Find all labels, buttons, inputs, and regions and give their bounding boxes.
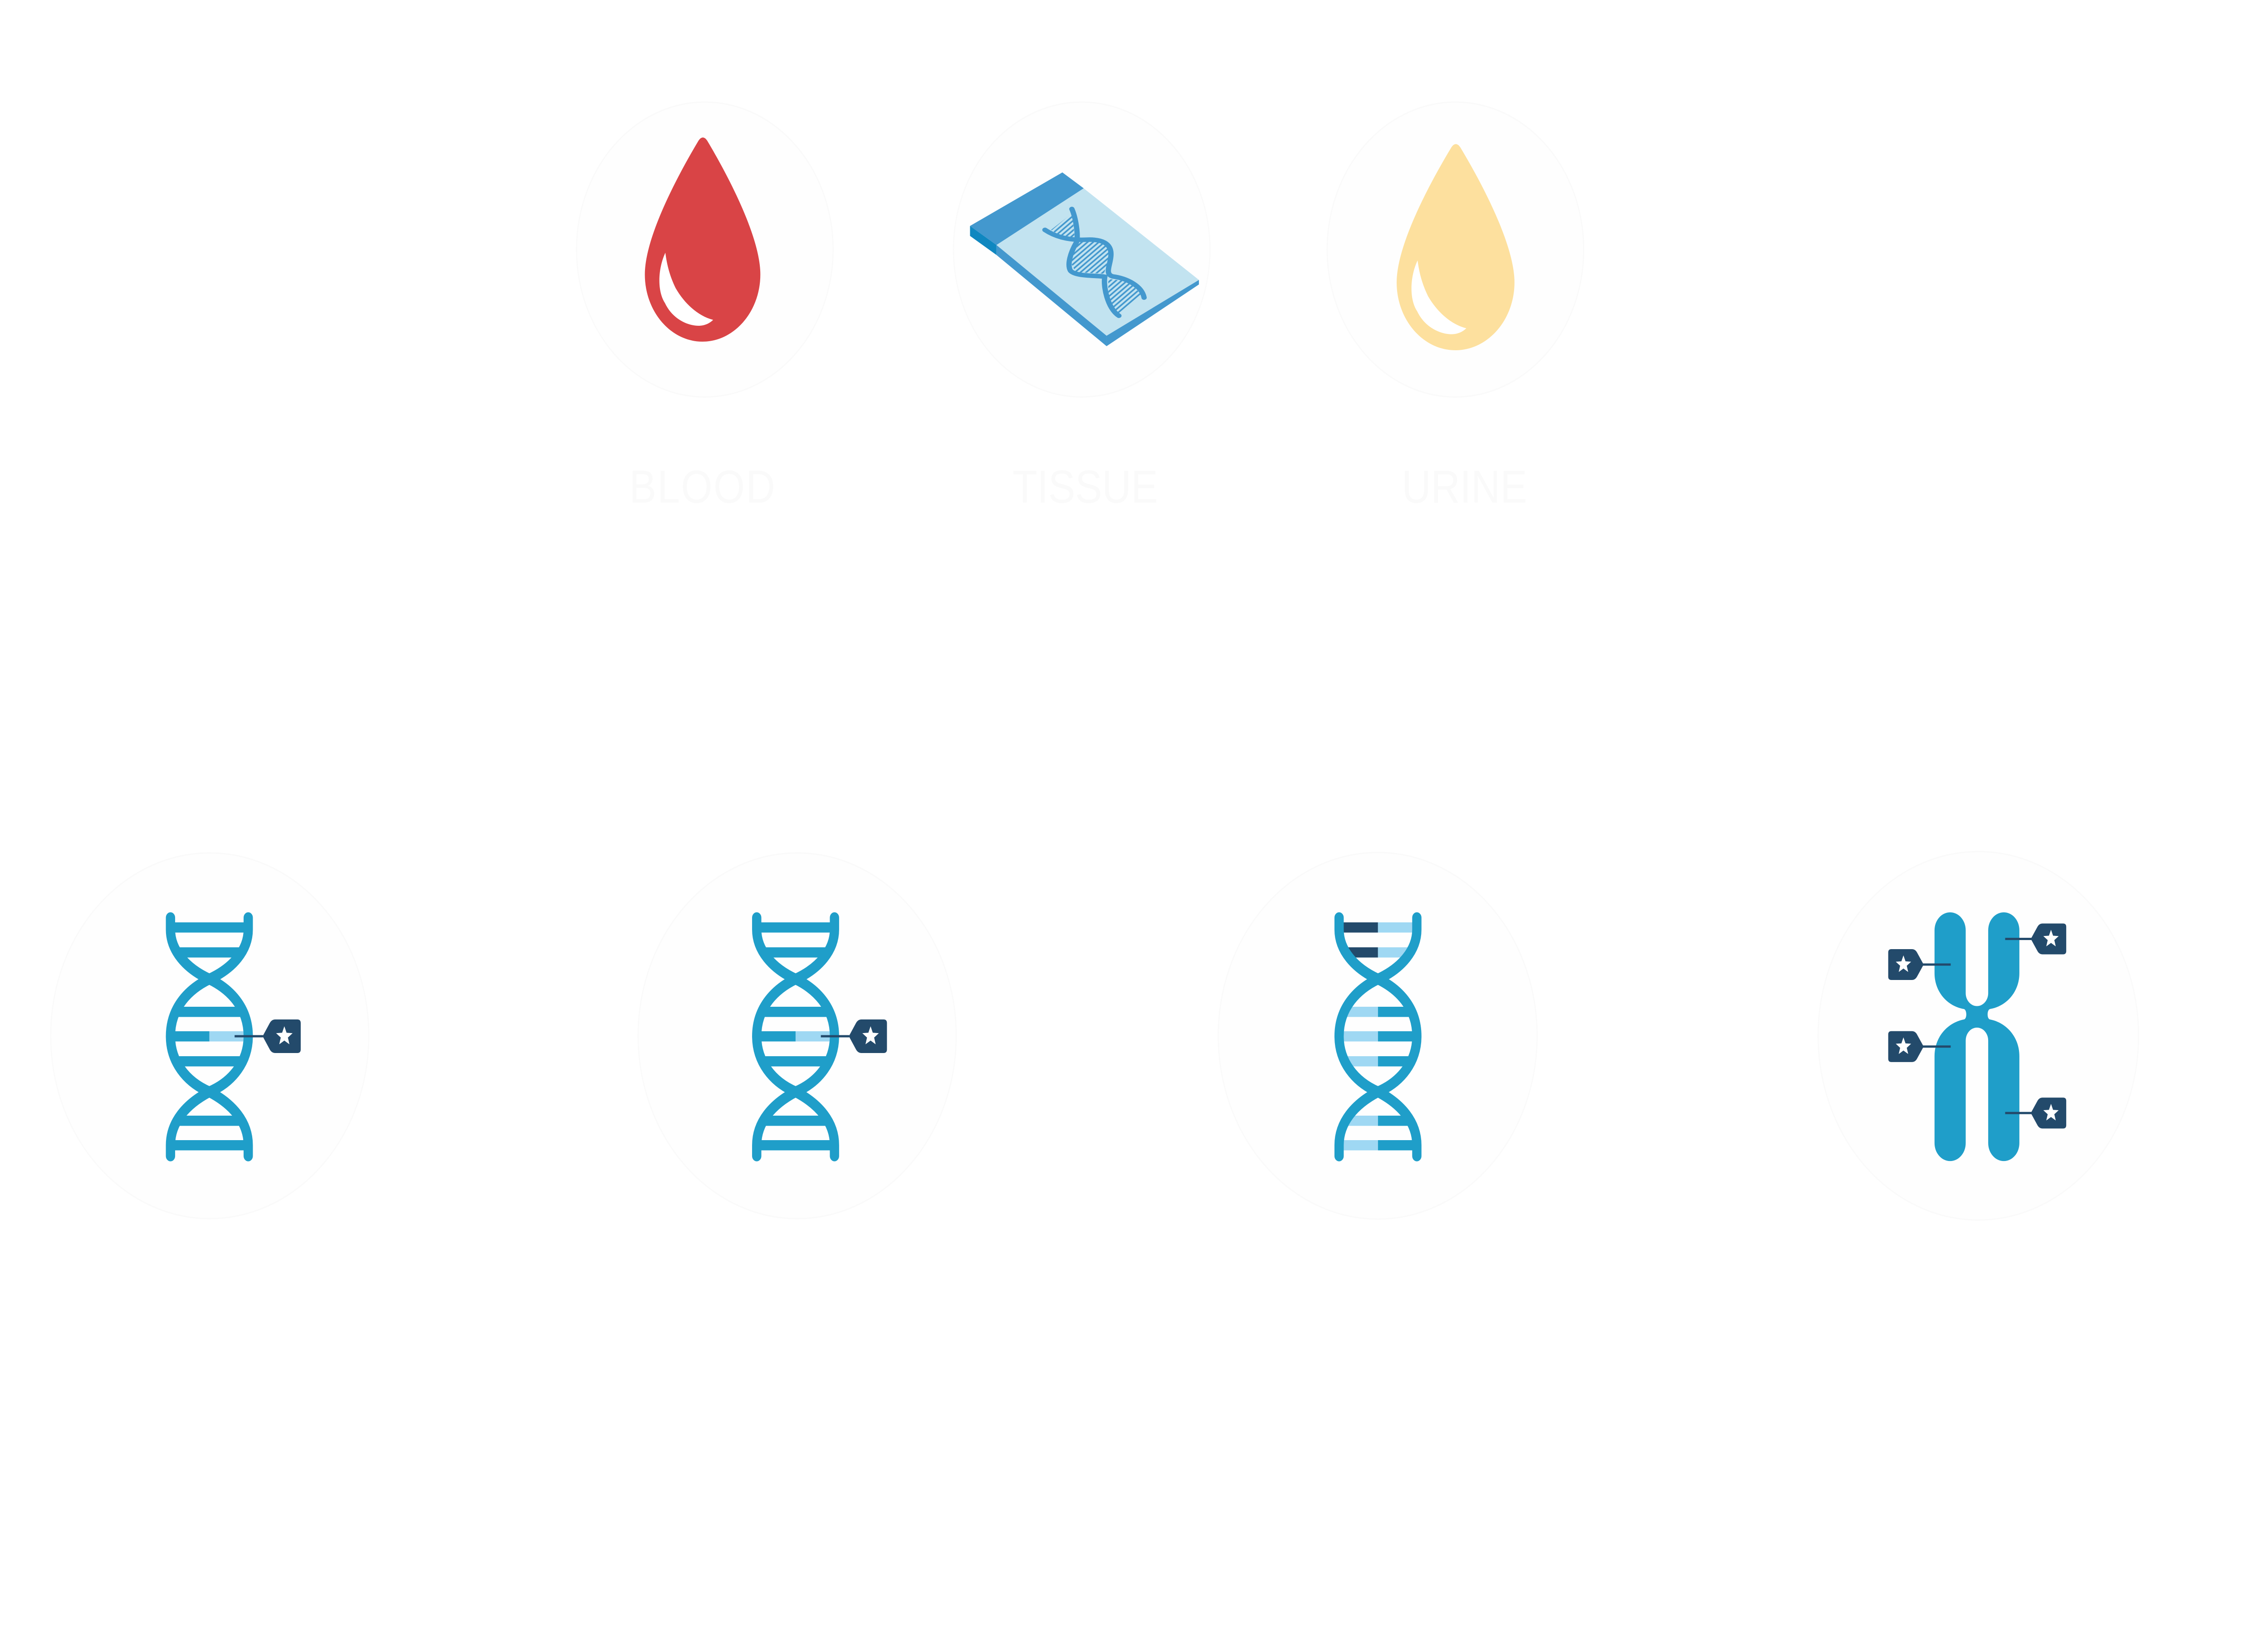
- tag: upper left: [1888, 949, 1951, 980]
- tag: upper right: [2005, 923, 2066, 955]
- icon: DNA helix with coloured rungs: [1339, 917, 1417, 1156]
- label: tissue: TISSUE: [1012, 461, 1158, 513]
- faint circle: blood: [577, 102, 833, 397]
- tag: lower right: [2005, 1097, 2066, 1128]
- icon: DNA helix with one marked base: [171, 917, 301, 1156]
- panel: chromosome with tags: [1818, 852, 2139, 1220]
- faint circle: tissue: [953, 102, 1210, 397]
- icon: chromosome: [1935, 912, 2019, 1161]
- icon: urine drop: [1397, 144, 1515, 350]
- icon: DNA helix with one marked base: [757, 917, 887, 1156]
- panel: tissue sample: [953, 102, 1210, 513]
- faint circle: chromosome: [1818, 852, 2139, 1220]
- faint circle: DNA 1: [51, 853, 369, 1219]
- tag: lower left: [1888, 1031, 1951, 1062]
- label: blood: BLOOD: [630, 461, 776, 513]
- faint circle: DNA 2: [638, 853, 956, 1219]
- icon: star tag: [263, 1019, 301, 1053]
- label: urine: URINE: [1402, 461, 1527, 513]
- marker line: [821, 1035, 849, 1037]
- panel: DNA with single tagged base, left: [51, 853, 369, 1219]
- faint circle: urine: [1327, 102, 1584, 397]
- faint circle: DNA 3: [1218, 852, 1537, 1219]
- marker line: [235, 1035, 263, 1037]
- panel: DNA with altered base pairs: [1218, 852, 1537, 1219]
- panel: urine sample: [1327, 102, 1584, 513]
- icon: DNA on slide: [1045, 209, 1144, 316]
- icon: tissue slide: [970, 172, 1199, 346]
- panel: DNA with single tagged base, second: [638, 853, 956, 1219]
- panel: blood sample: [577, 102, 833, 513]
- icon: star tag: [849, 1019, 887, 1053]
- icon: blood drop: [645, 137, 760, 342]
